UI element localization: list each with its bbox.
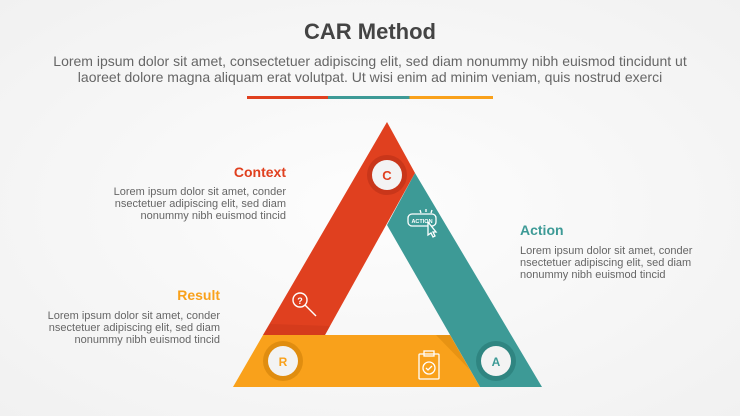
icon: action button — [408, 209, 436, 237]
action text block — [520, 222, 692, 281]
circle A — [476, 341, 516, 381]
circle A: A — [492, 355, 501, 369]
context text block: Context — [234, 164, 286, 180]
subtitle: laoreet dolore magna aliquam erat volutpat. Ut wisi enim ad minim veniam, quis nostrud exerci — [78, 69, 662, 85]
action text block: nsectetuer adipiscing elit, sed diam — [520, 257, 691, 269]
context text block: Lorem ipsum dolor sit amet, conder — [114, 186, 286, 198]
result text block: Lorem ipsum dolor sit amet, conder — [48, 310, 220, 322]
subtitle: Lorem ipsum dolor sit amet, consectetuer adipiscing elit, sed diam nonummy nibh euismod tincidunt ut — [53, 53, 687, 69]
result text block: nonummy nibh euismod tincid — [74, 334, 220, 346]
result text block — [48, 287, 220, 346]
orange side: result — [233, 335, 480, 387]
circle C: C — [382, 168, 392, 183]
action text block: Lorem ipsum dolor sit amet, conder — [520, 245, 692, 257]
circle R: R — [279, 355, 288, 369]
result text block: nsectetuer adipiscing elit, sed diam — [49, 322, 220, 334]
action text block: nonummy nibh euismod tincid — [520, 269, 666, 281]
result text block: Result — [177, 287, 220, 303]
context text block: nonummy nibh euismod tincid — [140, 210, 286, 222]
circle C — [367, 155, 407, 195]
context text block: nsectetuer adipiscing elit, sed diam — [115, 198, 286, 210]
title: CAR Method — [304, 19, 436, 44]
divider bar — [247, 96, 493, 99]
action text block: Action — [520, 222, 564, 238]
teal side: action — [387, 173, 542, 387]
subtitle — [53, 53, 687, 85]
context text block — [114, 164, 286, 222]
icon: clipboard — [419, 351, 439, 379]
icon: action button: ACTION — [411, 219, 433, 225]
icon: magnifier — [293, 293, 316, 316]
icon: magnifier: ? — [297, 296, 303, 306]
circle R — [263, 341, 303, 381]
red side: context — [263, 122, 415, 335]
